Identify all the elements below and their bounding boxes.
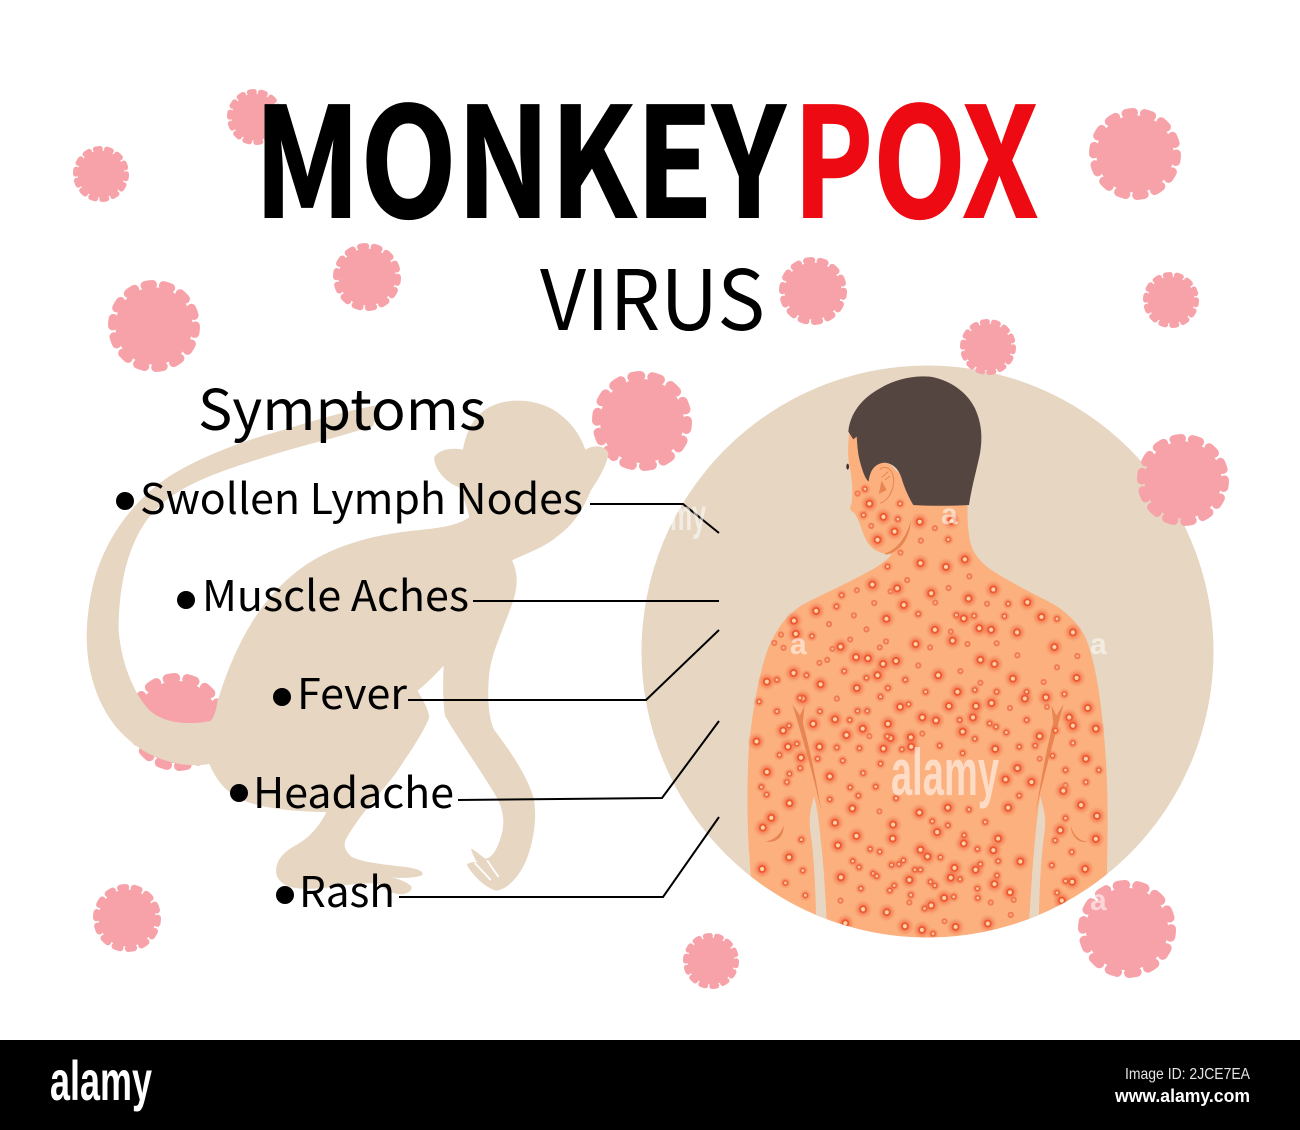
ear lines	[880, 467, 894, 503]
virus particles over the circle	[963, 322, 1224, 973]
rash spots medium	[753, 483, 1105, 940]
rash spots small	[771, 490, 1080, 924]
watermarks: a	[790, 628, 807, 661]
watermarks: a	[941, 498, 958, 531]
ear	[875, 464, 895, 498]
virus particle bottom left	[96, 887, 158, 949]
virus particle left large	[113, 285, 195, 367]
head details	[846, 376, 981, 506]
hair	[848, 376, 981, 506]
symptom: Fever: Fever	[297, 661, 408, 722]
virus particle beside monkey head	[597, 376, 687, 466]
footer url: www.alamy.com	[1114, 1086, 1250, 1106]
jaw and armpit creases	[766, 520, 1088, 842]
watermarks: alamy	[891, 735, 999, 809]
heading: Symptoms: Symptoms	[198, 366, 486, 447]
symptom: Muscle Aches: Muscle Aches	[202, 563, 469, 624]
symptom: Swollen Lymph Nodes: Swollen Lymph Nodes	[140, 466, 583, 527]
rash spots large	[747, 494, 1106, 939]
title: POX	[793, 43, 1038, 261]
virus particle centre left	[336, 246, 398, 308]
virus particle top right	[1094, 113, 1176, 195]
footer bar	[0, 1040, 1300, 1130]
ear inner	[879, 481, 887, 494]
watermarks: a	[1090, 628, 1107, 661]
circle backdrop	[642, 366, 1214, 938]
virus particle behind monkey tail	[133, 678, 221, 766]
footer image id: Image ID: 2JCE7EA	[1125, 1066, 1250, 1083]
virus particle top left	[76, 149, 126, 199]
title: MONKEY	[254, 43, 786, 261]
watermarks: my	[670, 491, 706, 540]
virus particle bottom centre	[686, 936, 736, 986]
symptom: Rash: Rash	[299, 859, 395, 920]
virus particle beside VIRUS	[782, 260, 844, 322]
watermarks	[670, 491, 1107, 917]
virus particle right	[1146, 275, 1196, 325]
watermarks: a	[1090, 884, 1107, 917]
leader lines	[399, 504, 719, 897]
symptom: Headache: Headache	[253, 760, 454, 821]
virus particles behind content	[76, 92, 1196, 986]
gap right of torso	[1029, 796, 1046, 918]
monkey silhouette	[87, 401, 609, 894]
skin body	[748, 431, 1108, 962]
virus particle on circle top	[963, 322, 1013, 372]
virus particle on circle bottom right	[1083, 885, 1171, 973]
eye	[846, 464, 849, 470]
subtitle: VIRUS	[540, 234, 765, 354]
man with rash	[747, 376, 1108, 962]
virus particle on circle right	[1142, 439, 1224, 521]
gap left of torso	[810, 796, 827, 919]
footer logo: alamy	[50, 1049, 152, 1112]
virus particle behind title	[230, 92, 280, 142]
